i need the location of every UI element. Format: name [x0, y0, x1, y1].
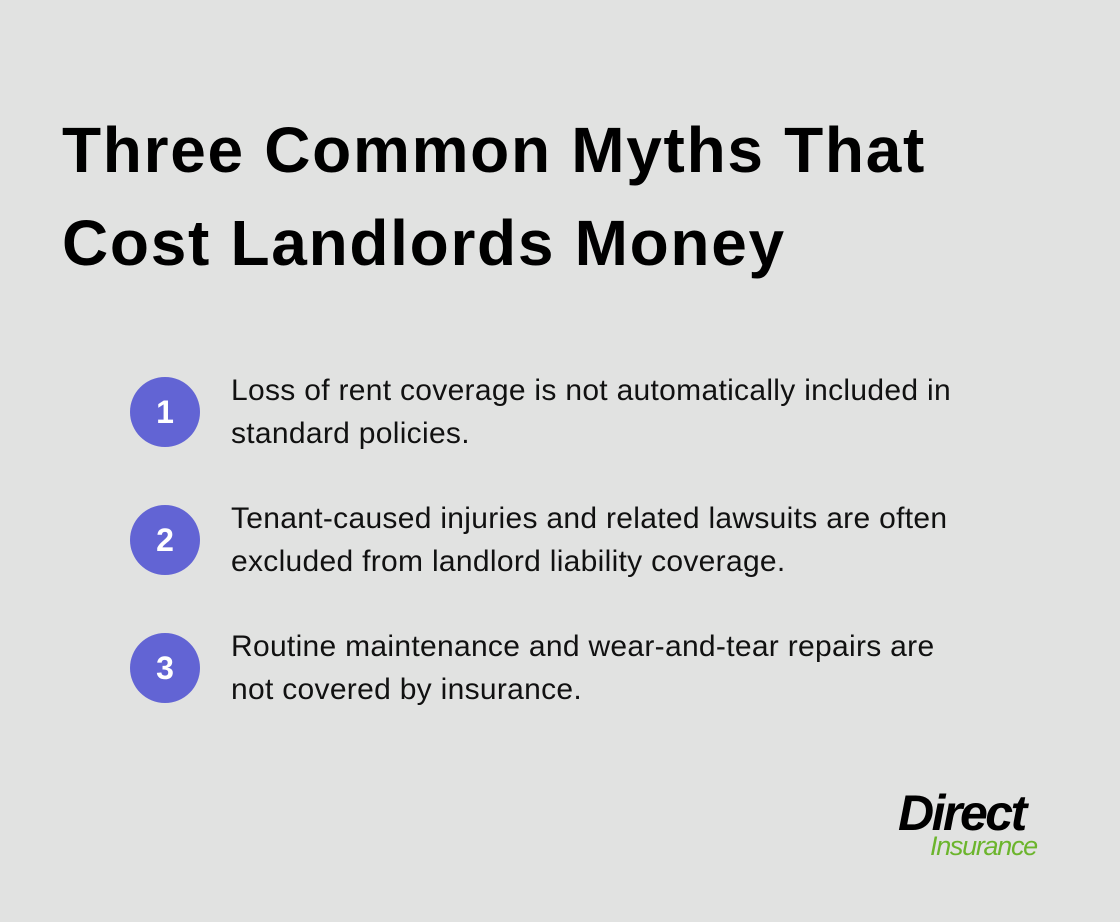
icon: number 2: [130, 505, 200, 575]
icon: number 1: [130, 377, 200, 447]
title: [62, 114, 926, 279]
logo: Insurance: [930, 831, 1037, 861]
item 1: [130, 374, 951, 450]
text 2: Tenant-caused injuries and related lawsuits are often excluded from landlord liability coverage.: [231, 502, 947, 578]
item 2: [130, 502, 947, 578]
icon: number 2: 2: [156, 522, 174, 558]
icon: number 3: 3: [156, 650, 174, 686]
title: Cost Landlords Money: [62, 207, 786, 279]
icon: number 1: 1: [156, 394, 174, 430]
icon: number 3: [130, 633, 200, 703]
logo: Direct: [898, 785, 1025, 841]
item 3: [130, 630, 934, 706]
text 1: Loss of rent coverage is not automatically included in standard policies.: [231, 374, 951, 450]
title: Three Common Myths That: [62, 114, 926, 186]
logo: [898, 785, 1038, 861]
text 3: Routine maintenance and wear-and-tear repairs are not covered by insurance.: [231, 630, 934, 706]
